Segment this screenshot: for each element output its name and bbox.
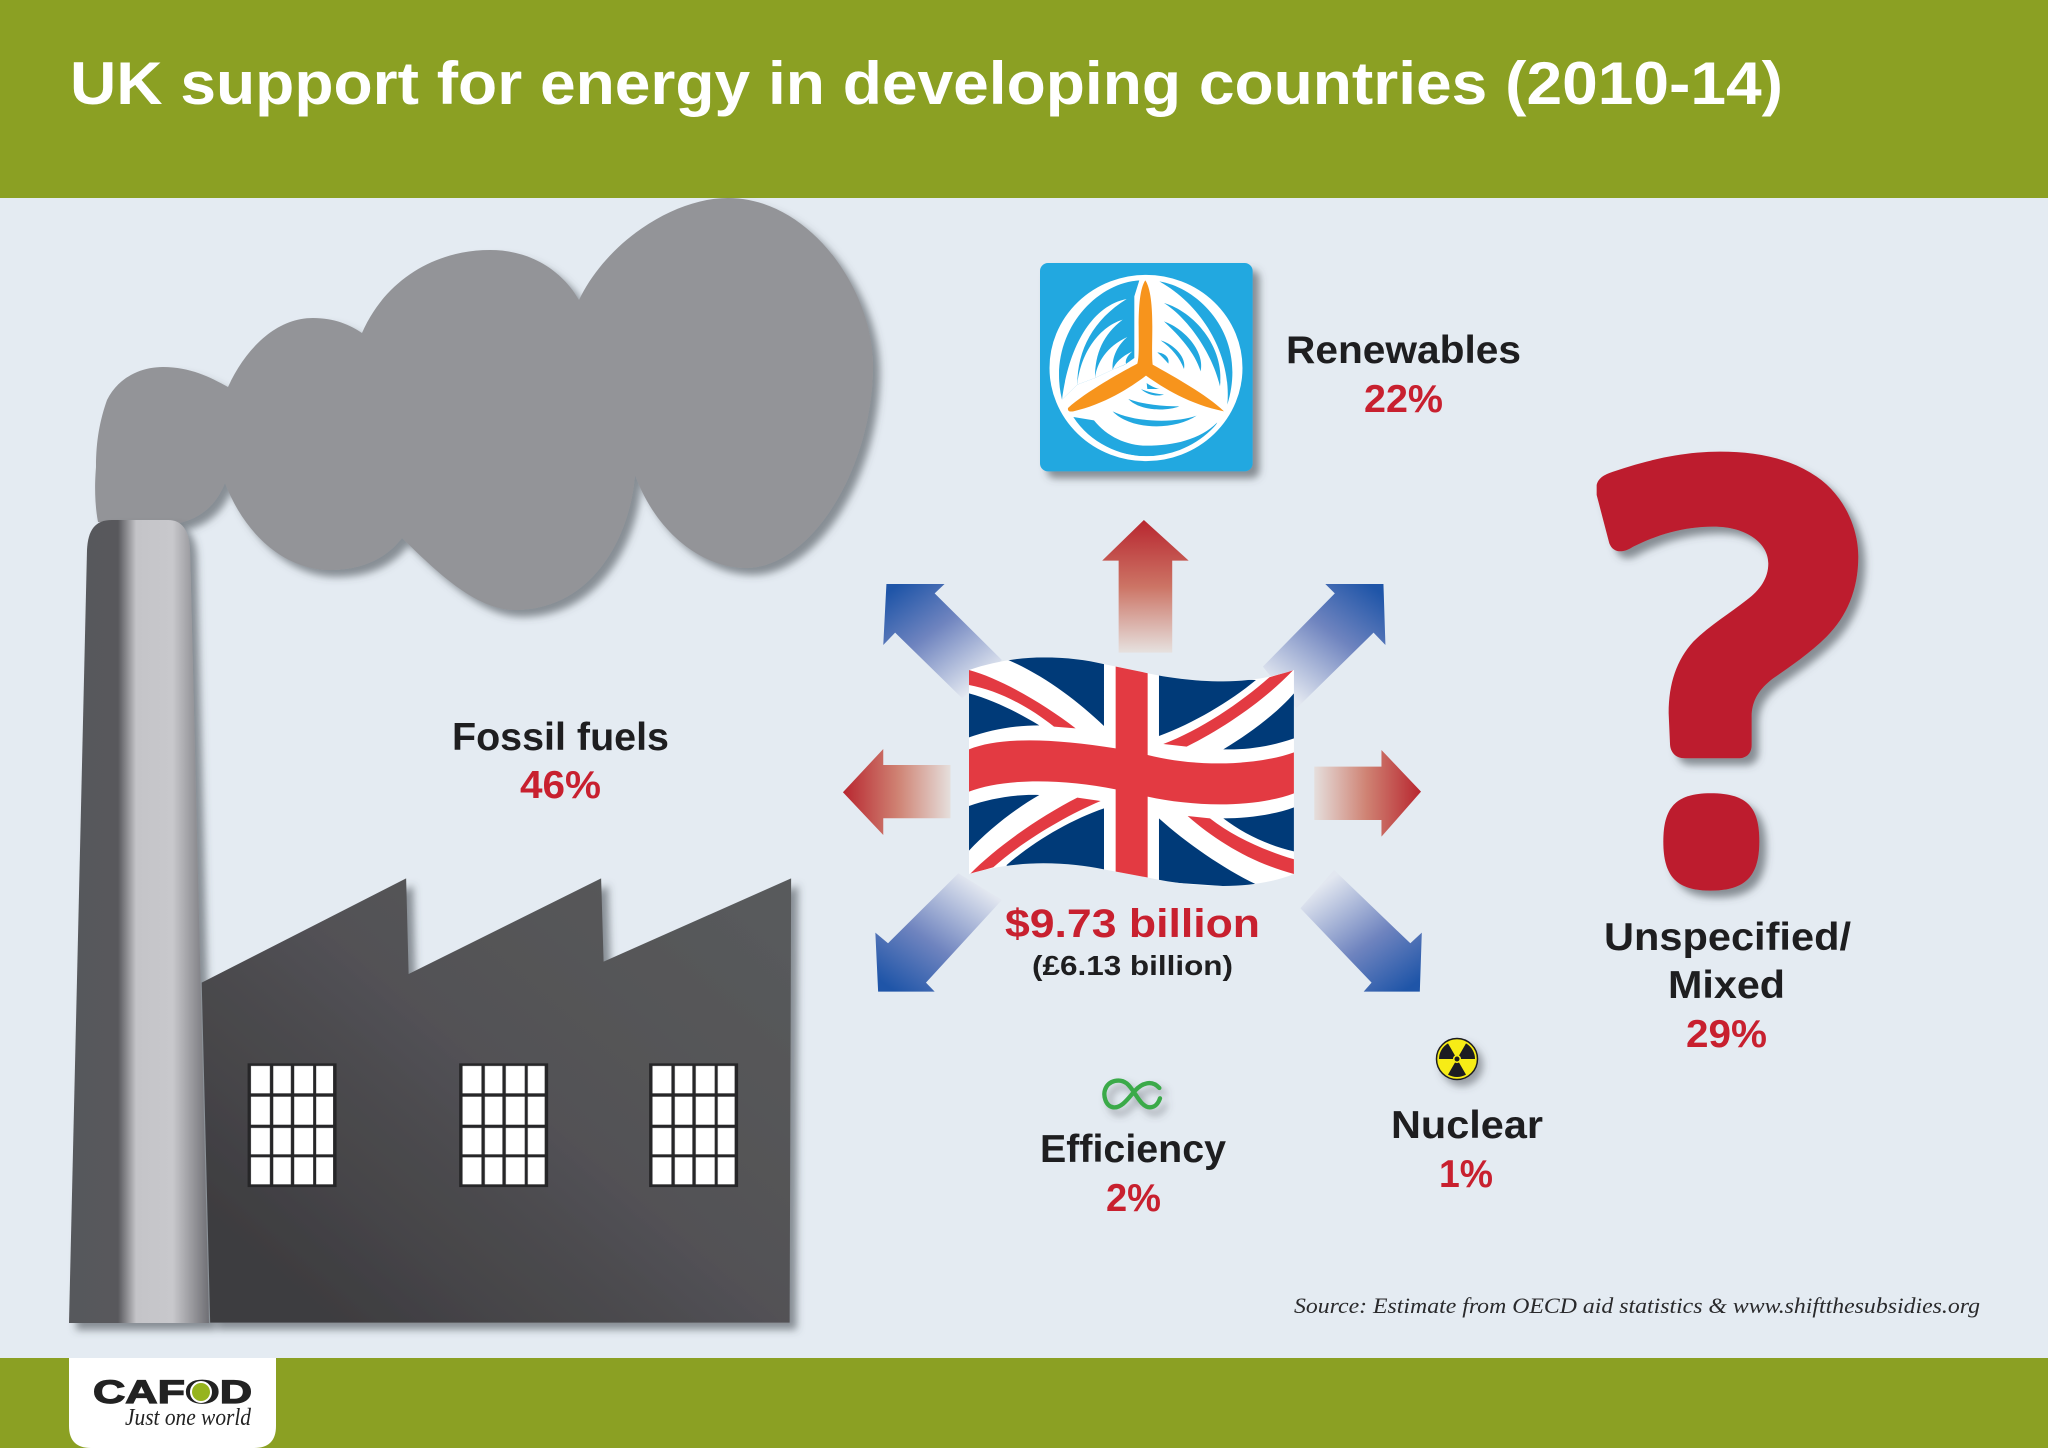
turbine blades <box>1068 280 1224 412</box>
arrow: upper right <box>1263 584 1385 708</box>
label: unspecified mixed: 29% <box>1686 1013 1767 1056</box>
arrow: upper left <box>883 584 1002 698</box>
label: efficiency: Efficiency <box>1040 1128 1226 1171</box>
factory building <box>202 878 791 1323</box>
CAFOD logo: CAFOD <box>93 1374 252 1410</box>
label: renewables: 22% <box>1364 378 1443 421</box>
icon: wind turbine <box>1040 263 1253 471</box>
label: unspecified mixed: Unspecified/ <box>1604 916 1851 959</box>
label: efficiency <box>1040 1128 1226 1220</box>
radiating arrows <box>843 584 1422 992</box>
icon: question mark <box>1597 452 1858 891</box>
label: fossil fuels: Fossil fuels <box>452 716 669 759</box>
window 3 <box>649 1063 738 1187</box>
label: nuclear: Nuclear <box>1391 1104 1543 1147</box>
label: efficiency: 2% <box>1106 1177 1161 1220</box>
label: nuclear: 1% <box>1439 1153 1493 1196</box>
source note: Source: Estimate from OECD aid statistics & www.shiftthesubsidies.org <box>1294 1293 1980 1318</box>
union flag <box>967 655 1297 888</box>
CAFOD logo <box>69 1358 276 1448</box>
CAFOD logo: Just one world <box>125 1405 252 1431</box>
label: fossil fuels: 46% <box>520 764 601 807</box>
icon: nuclear <box>1436 1038 1478 1080</box>
lower swirl <box>1073 417 1217 456</box>
arrow: left <box>843 749 950 835</box>
label: unspecified mixed <box>1604 916 1851 1056</box>
title: UK support for energy in developing countries (2010-14) <box>70 50 1783 117</box>
total amount: $9.73 billion <box>1005 902 1260 946</box>
total amount <box>1005 902 1260 981</box>
label: nuclear <box>1391 1104 1543 1196</box>
label: fossil fuels <box>452 716 669 807</box>
total amount: (£6.13 billion) <box>1032 950 1233 981</box>
arrow: lower right <box>1300 870 1422 992</box>
window 2 <box>459 1063 548 1187</box>
chimney <box>69 520 209 1323</box>
left swirl <box>1059 280 1139 400</box>
footer band <box>0 1358 2048 1448</box>
arrow: lower left <box>875 873 1002 992</box>
right swirl <box>1159 281 1232 405</box>
factory windows <box>248 1063 738 1187</box>
arrow: right <box>1314 750 1421 837</box>
arrow: up <box>1102 520 1189 653</box>
header band <box>0 0 2048 198</box>
label: renewables <box>1286 329 1521 421</box>
label: unspecified mixed: Mixed <box>1668 964 1785 1007</box>
smoke cloud <box>95 198 873 610</box>
window 1 <box>248 1063 336 1187</box>
label: renewables: Renewables <box>1286 329 1521 372</box>
factory with chimney <box>69 520 791 1323</box>
icon: efficiency infinity <box>1104 1081 1160 1107</box>
